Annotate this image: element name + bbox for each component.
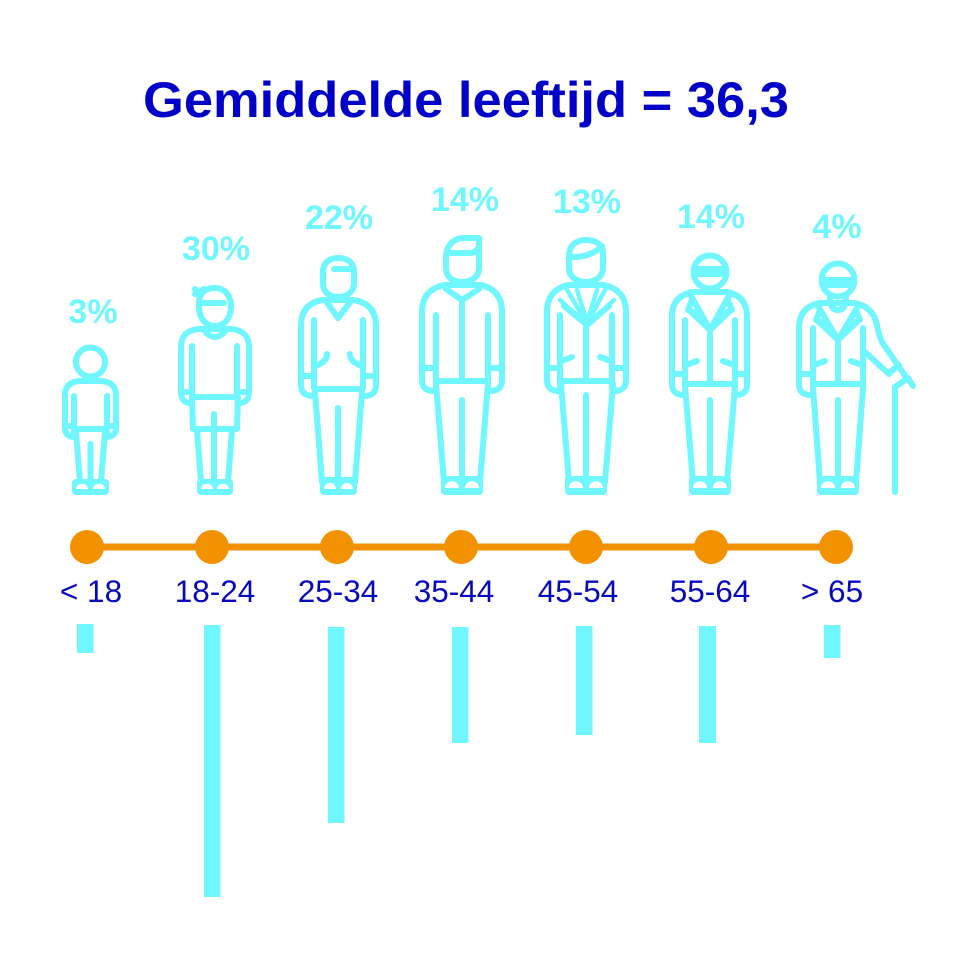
label: 25-34 share: 22%: [305, 199, 373, 237]
icon: teenager: [181, 288, 249, 495]
age group labels: 45-54: [538, 573, 618, 609]
age group labels: [60, 573, 863, 609]
bar chart: [77, 624, 840, 897]
scarf: [560, 288, 614, 326]
age group labels: 55-64: [670, 573, 750, 609]
icon: middle-aged man with scarf: [547, 240, 626, 495]
age group labels: 18-24: [175, 573, 255, 609]
label: over 65 share: 4%: [812, 208, 862, 246]
label: 18-24 share: 30%: [182, 230, 250, 268]
icon: older man with glasses: [672, 256, 747, 495]
icon: elderly man with cane: [799, 264, 913, 495]
icon: child: [65, 348, 116, 495]
title: Gemiddelde leeftijd = 36,3: [143, 72, 789, 128]
label: 35-44 share: 14%: [431, 181, 499, 219]
age group labels: < 18: [60, 573, 122, 609]
label: 55-64 share: 14%: [677, 198, 745, 236]
icon: young adult with V-neck sweater: [301, 258, 376, 495]
label: 45-54 share: 13%: [553, 183, 621, 221]
age group labels: 35-44: [414, 573, 494, 609]
age group labels: > 65: [801, 573, 863, 609]
timeline axis: [70, 530, 853, 564]
label: under 18 share: 3%: [68, 293, 118, 331]
age group labels: 25-34: [298, 573, 378, 609]
icon: adult with jacket: [422, 238, 502, 495]
percentage labels: [68, 181, 862, 331]
